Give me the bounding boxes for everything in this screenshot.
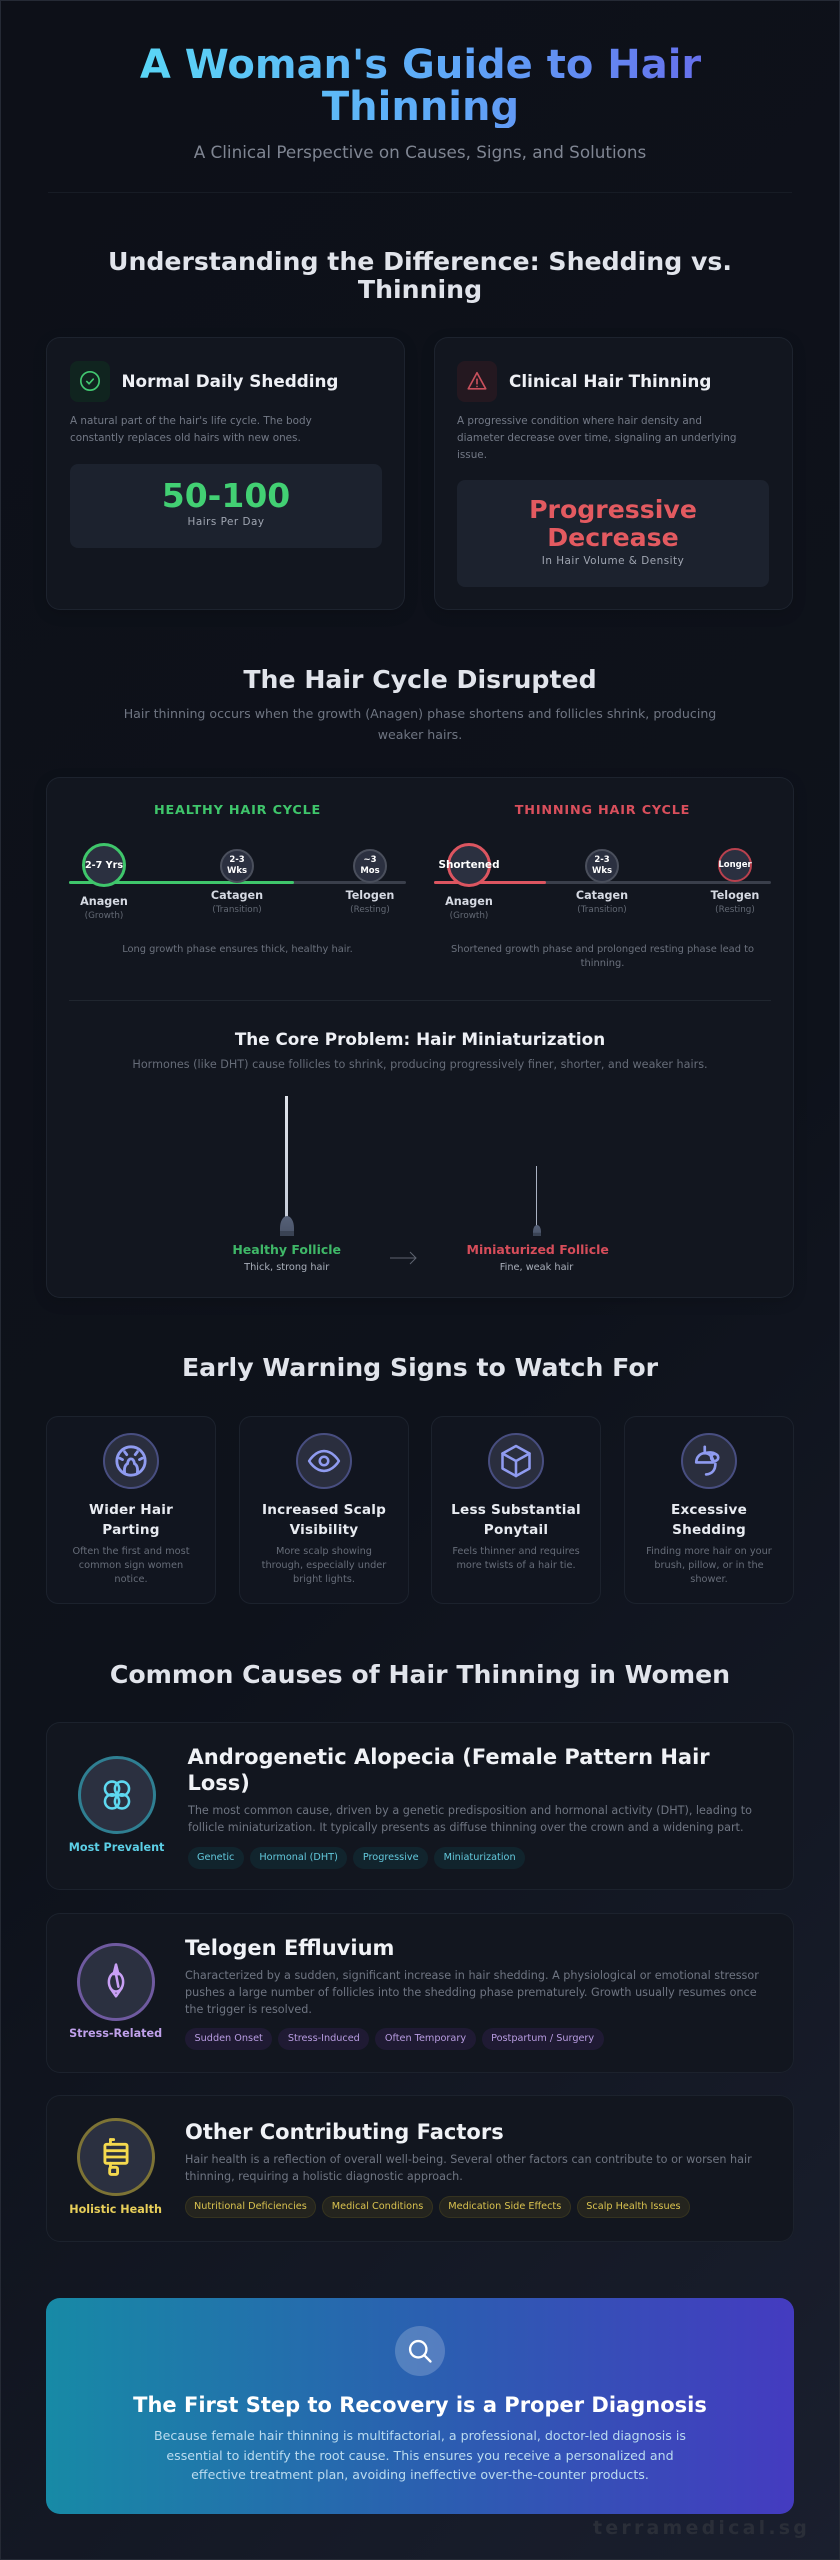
icon: dna loops	[78, 1756, 156, 1834]
cause title: Androgenetic Alopecia (Female Pattern Hair	[188, 1745, 710, 1769]
healthy follicle	[232, 1096, 341, 1273]
phase node: telogen	[353, 849, 387, 883]
timeline track	[434, 881, 771, 884]
phase node: catagen	[585, 849, 619, 883]
cause description	[185, 2152, 752, 2182]
sign title: Excessive	[671, 1502, 747, 1518]
section intro text: weaker hairs.	[378, 727, 462, 742]
tag: Medical Conditions	[332, 2201, 423, 2212]
sign description	[72, 1546, 190, 1585]
sign title	[671, 1502, 747, 1538]
phase node: anagen	[447, 843, 491, 887]
sign title: Shedding	[672, 1522, 746, 1538]
section intro text: Hair thinning occurs when the growth (Anagen) phase shortens and follicles shrink, producing	[124, 706, 716, 721]
anagen label: Anagen	[80, 895, 128, 908]
cause label: Most Prevalent	[69, 1841, 164, 1854]
cause card: other factors	[46, 2095, 794, 2242]
cause label: Stress-Related	[69, 2027, 162, 2040]
panel: hair cycle comparison	[46, 777, 794, 1298]
tag: Medication Side Effects	[448, 2201, 561, 2212]
sign card: ponytail	[431, 1416, 601, 1604]
stat label: Hairs Per Day	[188, 516, 264, 528]
tag	[375, 2028, 476, 2050]
cycle note: Shortened growth phase and prolonged resting phase lead to	[451, 944, 754, 955]
cause title: Telogen Effluvium	[185, 1936, 394, 1960]
miniaturized follicle	[466, 1166, 609, 1273]
thinning hair cycle	[434, 803, 771, 969]
hair shaft	[536, 1166, 537, 1226]
phase node: telogen: ~3	[363, 855, 377, 865]
heading: shedding vs thinning: Understanding the Difference: Shedding vs.	[108, 247, 732, 276]
cycle note	[451, 944, 754, 969]
icon: magnifier	[395, 2326, 445, 2376]
cause description: follicle miniaturization. It typically presents as diffuse thinning over the crown and a widening part.	[188, 1820, 744, 1834]
anagen sublabel: (Growth)	[450, 911, 488, 921]
sign description: notice.	[114, 1574, 148, 1585]
stat: progressive decrease	[457, 480, 769, 587]
tag: Nutritional Deficiencies	[194, 2201, 307, 2212]
tag: Postpartum / Surgery	[491, 2033, 594, 2044]
tag	[577, 2196, 690, 2218]
cause description	[185, 1968, 759, 2016]
cause description	[188, 1804, 752, 1834]
cause description: thinning, requiring a holistic diagnostic approach.	[185, 2170, 463, 2182]
sign description: More scalp showing	[276, 1546, 372, 1557]
tag: Scalp Health Issues	[586, 2201, 681, 2212]
anagen sublabel: (Growth)	[85, 911, 123, 921]
phase node: catagen: 2-3	[229, 855, 245, 865]
phase node: anagen: Shortened	[438, 859, 500, 871]
catagen label: Catagen	[211, 889, 263, 902]
tag	[184, 2196, 316, 2218]
sign title: Visibility	[290, 1522, 358, 1538]
title: A Woman's Guide to Hair	[140, 42, 701, 88]
cause description: Characterized by a sudden, significant increase in hair shedding. A physiological or emotional stressor	[185, 1968, 759, 1982]
cta title: The First Step to Recovery is a Proper Diagnosis	[133, 2393, 707, 2417]
cycle title: HEALTHY HAIR CYCLE	[154, 803, 321, 818]
header	[140, 42, 701, 162]
subtitle: A Clinical Perspective on Causes, Signs, and Solutions	[194, 142, 646, 162]
sign title	[262, 1502, 386, 1538]
tags	[185, 2028, 604, 2050]
tag	[482, 2028, 604, 2050]
cta description: Because female hair thinning is multifactorial, a professional, doctor-led diagnosis is	[154, 2428, 686, 2443]
heading: shedding vs thinning: Thinning	[358, 275, 482, 304]
tag: Genetic	[197, 1852, 234, 1863]
stat value: 50-100	[162, 476, 290, 515]
label: Healthy Follicle	[232, 1242, 341, 1257]
sign title: Ponytail	[484, 1522, 548, 1538]
sign card: wider parting	[46, 1416, 216, 1604]
card description: diameter decrease over time, signaling an underlying	[457, 432, 736, 444]
phase node: catagen	[220, 849, 254, 883]
cause description: Hair health is a reflection of overall well-being. Several other factors can contribute to or worsen hair	[185, 2152, 752, 2166]
cause label: Holistic Health	[69, 2203, 162, 2216]
catagen sublabel: (Transition)	[577, 905, 627, 915]
telogen label: Telogen	[346, 889, 394, 902]
catagen label: Catagen	[576, 889, 628, 902]
sublabel: Fine, weak hair	[500, 1262, 573, 1273]
icon: shedding	[681, 1433, 737, 1489]
hair shaft	[285, 1096, 288, 1218]
sign title: Wider Hair	[89, 1502, 173, 1518]
tags	[185, 2196, 690, 2218]
telogen sublabel: (Resting)	[350, 905, 390, 915]
card title: Normal Daily Shedding	[122, 371, 338, 391]
phase node: anagen: 2-7 Yrs	[85, 860, 123, 870]
cause description: The most common cause, driven by a genetic predisposition and hormonal activity (DHT), leading to	[188, 1804, 752, 1816]
timeline track	[69, 881, 406, 884]
section intro text	[124, 706, 716, 742]
cta description	[154, 2428, 686, 2482]
sign description: shower.	[690, 1574, 728, 1585]
tag: Sudden Onset	[194, 2033, 263, 2044]
phase node: catagen: Wks	[592, 866, 612, 876]
sign card: excessive shedding	[624, 1416, 794, 1604]
sign description: common sign women	[79, 1560, 183, 1571]
phase node: anagen	[82, 843, 126, 887]
tag	[434, 1847, 525, 1869]
sign description: bright lights.	[293, 1574, 355, 1585]
call to action panel	[46, 2298, 794, 2514]
tag: Often Temporary	[385, 2033, 466, 2044]
sign title	[451, 1502, 581, 1538]
sign card: scalp visibility	[239, 1416, 409, 1604]
tag: Stress-Induced	[288, 2033, 360, 2044]
sign description: Feels thinner and requires	[452, 1546, 580, 1557]
card description: issue.	[457, 449, 487, 461]
sign description	[646, 1546, 772, 1585]
catagen sublabel: (Transition)	[212, 905, 262, 915]
cause description: the trigger is resolved.	[185, 2002, 312, 2016]
tag	[322, 2196, 433, 2218]
sign title: Less Substantial	[451, 1502, 581, 1518]
tag	[185, 2028, 272, 2050]
icon: check circle	[70, 361, 110, 402]
watermark: terramedical.sg	[593, 2517, 810, 2539]
cause card: androgenetic alopecia	[46, 1722, 794, 1890]
cta description: essential to identify the root cause. This ensures you receive a personalized and	[166, 2448, 674, 2462]
phase node: catagen: 2-3	[594, 855, 610, 865]
panel: normal daily shedding	[46, 337, 405, 610]
sign description: through, especially under	[262, 1560, 386, 1571]
card description: A natural part of the hair's life cycle. The body	[70, 415, 312, 427]
icon: parting	[103, 1433, 159, 1489]
cause title: Loss)	[188, 1771, 250, 1795]
healthy hair cycle	[69, 803, 406, 955]
phase node: catagen: Wks	[227, 866, 247, 876]
arrow	[390, 1252, 416, 1264]
cause description: pushes a large number of follicles into the shedding phase prematurely. Growth usually resumes once	[185, 1986, 757, 1998]
stat label: In Hair Volume & Density	[542, 555, 684, 567]
tag: Miniaturization	[444, 1852, 516, 1863]
sign description	[452, 1546, 580, 1571]
tag	[250, 1847, 347, 1869]
tag	[439, 2196, 571, 2218]
label: Miniaturized Follicle	[466, 1242, 609, 1257]
heading: hair cycle: The Hair Cycle Disrupted	[243, 665, 597, 694]
icon: list chart	[77, 2118, 155, 2196]
tag	[278, 2028, 369, 2050]
heading: warning signs: Early Warning Signs to Watch For	[182, 1353, 658, 1382]
card description	[457, 415, 736, 461]
sign title	[89, 1502, 173, 1538]
telogen sublabel: (Resting)	[715, 905, 755, 915]
panel: clinical hair thinning	[434, 337, 793, 610]
phase node: telogen	[718, 848, 752, 882]
sign description: Finding more hair on your	[646, 1546, 772, 1557]
title	[138, 44, 703, 128]
follicle bulb	[532, 1225, 540, 1236]
section description: Hormones (like DHT) cause follicles to shrink, producing progressively finer, shorter, and weaker hairs.	[132, 1058, 708, 1071]
stat value: Progressive	[529, 495, 697, 524]
sign title: Increased Scalp	[262, 1502, 386, 1518]
tag: Hormonal (DHT)	[259, 1852, 338, 1863]
cycle note: Long growth phase ensures thick, healthy hair.	[122, 944, 353, 955]
icon: warning triangle	[457, 361, 497, 402]
tag	[188, 1847, 244, 1869]
heading: shedding vs thinning	[108, 247, 732, 304]
sign title: Parting	[102, 1522, 160, 1538]
phase node: telogen: Longer	[718, 860, 752, 870]
card title: Clinical Hair Thinning	[509, 371, 711, 391]
sublabel: Thick, strong hair	[244, 1262, 329, 1273]
telogen label: Telogen	[711, 889, 759, 902]
stat: hairs per day	[70, 464, 382, 548]
cycle note: thinning.	[581, 958, 624, 969]
icon: box	[488, 1433, 544, 1489]
card description: A progressive condition where hair density and	[457, 415, 702, 427]
cycle title: THINNING HAIR CYCLE	[515, 803, 690, 818]
tag: Progressive	[363, 1852, 419, 1863]
sign description: brush, pillow, or in the	[654, 1560, 764, 1571]
miniaturization section	[132, 1029, 708, 1273]
card description	[70, 415, 312, 444]
follicle bulb	[280, 1216, 294, 1236]
sign description: more twists of a hair tie.	[456, 1560, 576, 1571]
stat value: Decrease	[547, 523, 679, 552]
stat value	[529, 495, 697, 552]
cause card: telogen effluvium	[46, 1913, 794, 2073]
title: Thinning	[322, 84, 519, 130]
icon: stress	[77, 1943, 155, 2021]
sign description	[262, 1546, 386, 1585]
anagen label: Anagen	[445, 895, 493, 908]
cta description: effective treatment plan, avoiding ineffective over-the-counter products.	[191, 2467, 649, 2482]
card description: constantly replaces old hairs with new ones.	[70, 432, 301, 444]
sign description: Often the first and most	[72, 1546, 190, 1557]
phase node: telogen: Mos	[360, 866, 380, 876]
cause title	[188, 1745, 710, 1795]
cause title: Other Contributing Factors	[185, 2120, 504, 2144]
heading: common causes: Common Causes of Hair Thinning in Women	[110, 1660, 730, 1689]
tags	[188, 1847, 525, 1869]
tag	[353, 1847, 428, 1869]
icon: eye	[296, 1433, 352, 1489]
section title: The Core Problem: Hair Miniaturization	[235, 1029, 605, 1049]
